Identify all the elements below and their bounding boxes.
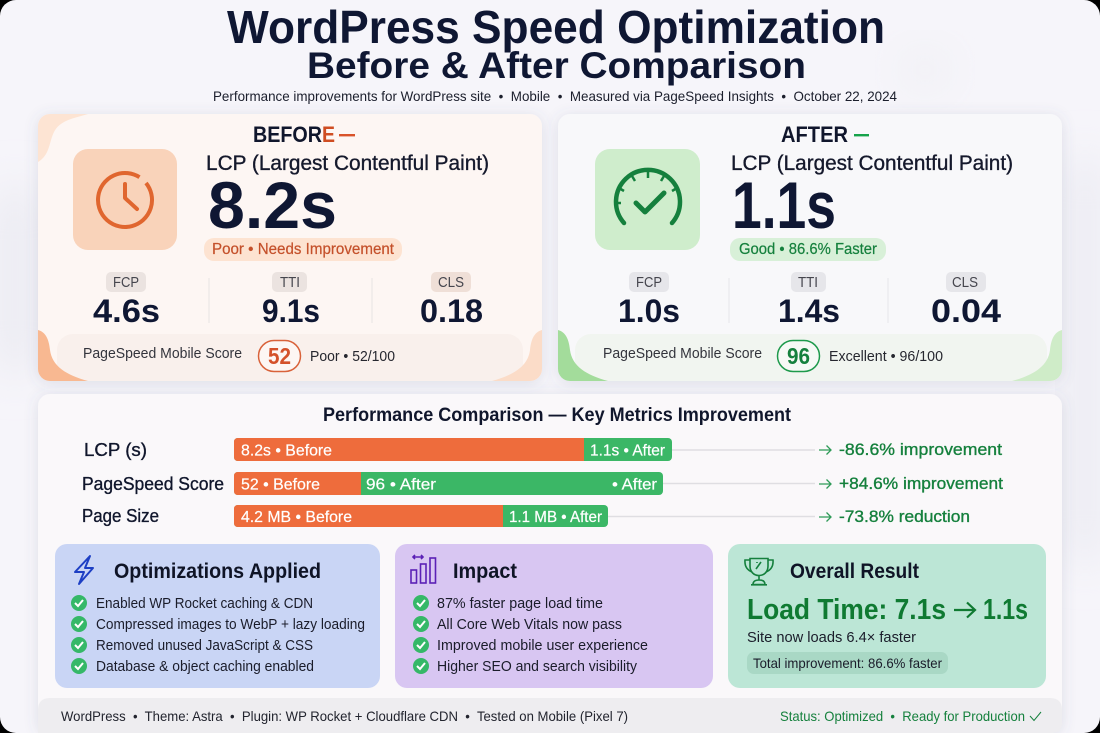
metric: FCP: FCP [113,274,139,291]
panel: before [38,114,542,381]
icon: lightning bolt [75,556,93,584]
pagespeed strip background [575,334,1047,381]
metric: CLS [931,272,1001,329]
card: overall result [728,544,1046,688]
bar row: PageSpeed Score: • After [612,476,658,494]
LCP label: LCP (Largest Contentful Paint) [731,152,1013,175]
pagespeed strip background [57,334,523,381]
footer bar: WordPress • Theme: Astra • Plugin: WP Rocket + Cloudflare CDN • Tested on Mobile (Pixel 7) [61,708,628,724]
metric: FCP: 4.6s [93,293,160,329]
bar row: PageSpeed Score [82,472,1003,495]
overall heading: Overall Result [790,560,919,583]
metric: CLS [420,272,483,329]
LCP value: 1.1s [732,168,836,242]
metric: TTI [778,272,840,329]
footer bar: Status: Optimized • Ready for Production [780,708,1025,724]
metric: CLS: CLS [438,274,464,291]
pagespeed score: PageSpeed Mobile Score [83,345,242,362]
bar row: Page Size: -73.8% reduction [839,507,970,526]
title: WordPress Speed Optimization [227,1,885,53]
icon: speedometer check [595,149,700,250]
title [227,1,885,86]
optimizations list: Compressed images to WebP + lazy loading [96,616,365,633]
metric: TTI: TTI [280,274,300,291]
panel: after [558,114,1062,381]
pagespeed score: Excellent • 96/100 [829,349,943,365]
optimizations list: Enabled WP Rocket caching & CDN [96,595,313,612]
bar row: LCP: LCP (s) [84,439,147,460]
bar row: LCP: 1.1s • After [590,442,666,460]
before heading: E [322,122,335,147]
impact list: Higher SEO and search visibility [437,658,637,675]
card: impact [395,544,713,688]
card: optimizations applied [55,544,380,688]
title: Before & After Comparison [307,45,806,86]
bar row: PageSpeed Score: +84.6% improvement [839,474,1003,493]
optimizations list: Removed unused JavaScript & CSS [96,637,313,654]
bar row: LCP: -86.6% improvement [839,440,1002,459]
optimizations heading: Optimizations Applied [114,560,321,583]
status pill [204,238,402,261]
comparison heading: Performance Comparison — Key Metrics Improvement [323,405,792,426]
improvement pill: Total improvement: 86.6% faster [753,655,942,671]
status pill: Good • 86.6% Faster [739,241,877,258]
bar row: Page Size [82,505,970,527]
pagespeed score [603,340,943,372]
optimizations list: Database & object caching enabled [96,658,314,675]
metric: FCP: FCP [636,274,662,291]
LCP label: LCP (Largest Contentful Paint) [206,152,489,175]
metric: TTI: TTI [798,274,818,291]
bar row: Page Size: Page Size [82,505,159,526]
impact list [413,595,648,675]
metric: CLS: 0.04 [931,293,1001,329]
metric: TTI: 9.1s [262,293,320,329]
footer bar [38,698,1062,733]
pagespeed score: Poor • 52/100 [310,349,395,365]
panel: performance comparison [38,394,1062,733]
status pill [730,238,886,261]
bar row: PageSpeed Score: PageSpeed Score [82,473,224,494]
bar row: PageSpeed Score: 96 • After [366,476,437,494]
status pill: Poor • Needs Improvement [212,241,395,258]
metric: TTI [262,272,320,329]
pagespeed score: 52 [268,343,291,369]
LCP value: 8.2s [208,168,337,242]
metric: FCP: 1.0s [618,293,680,329]
bar row: LCP: 8.2s • Before [241,442,332,460]
impact list: Improved mobile user experience [437,637,648,654]
icon: bar chart [411,555,436,583]
before heading: BEFOR [253,122,322,147]
optimizations list [71,595,365,675]
impact list: 87% faster page load time [437,595,603,612]
metric: FCP [93,272,160,329]
impact heading: Impact [453,560,517,583]
subtitle: Performance improvements for WordPress site • Mobile • Measured via PageSpeed Insights • October 22, 2024 [213,88,897,104]
bar row: Page Size: 4.2 MB • Before [241,509,352,526]
metric: TTI: 1.4s [778,293,840,329]
metric: CLS: CLS [952,274,978,291]
speed note: Site now loads 6.4× faster [747,629,916,646]
bar row: PageSpeed Score: 52 • Before [241,476,320,494]
metric: CLS: 0.18 [420,293,483,329]
impact list: All Core Web Vitals now pass [437,616,622,633]
improvement pill [747,652,948,674]
load time headline: 1.1s [983,594,1028,626]
bar row: Page Size: 1.1 MB • After [509,509,603,526]
bar row: LCP [84,438,1002,461]
metric: FCP [618,272,680,329]
pagespeed score: PageSpeed Mobile Score [603,345,762,362]
icon: trophy [745,558,773,585]
icon: clock [73,149,177,250]
pagespeed score: 96 [787,343,810,369]
pagespeed score [83,340,395,372]
after heading: AFTER [781,122,848,147]
load time headline: Load Time: 7.1s [747,594,946,626]
